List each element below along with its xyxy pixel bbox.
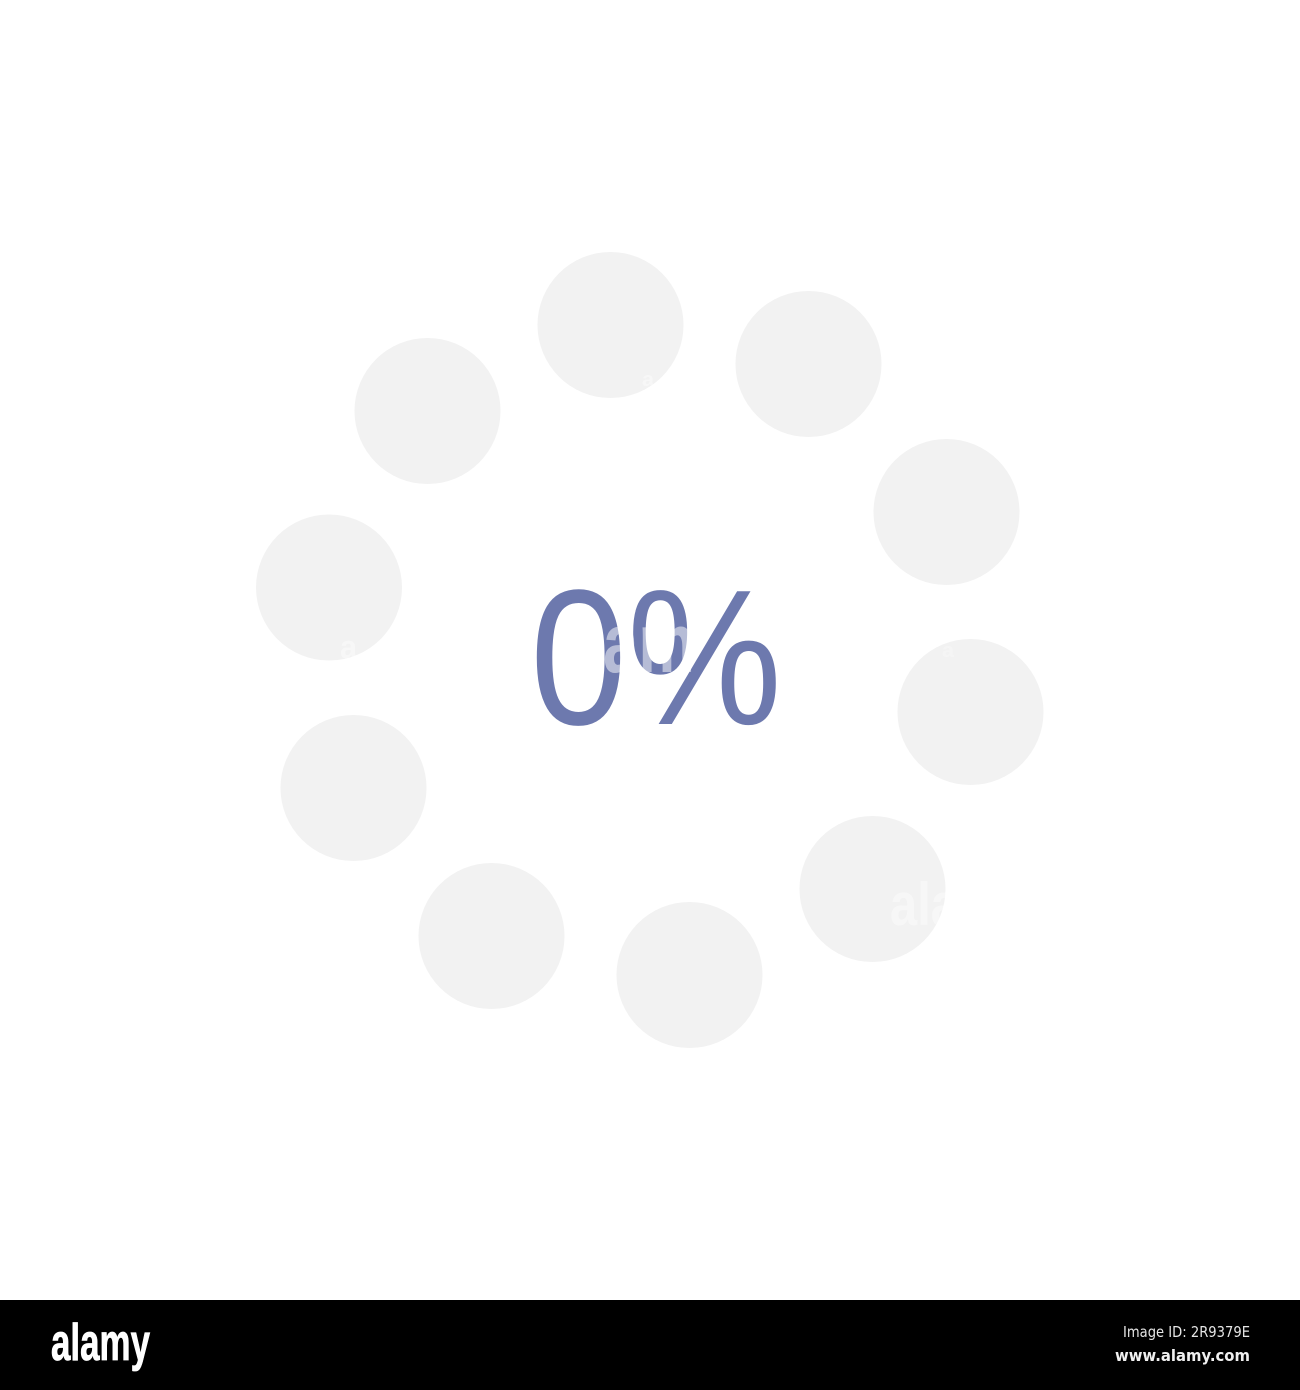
alamy logo: alamy [51,1314,150,1372]
faint stock watermark fragments: ala [890,871,959,938]
faint stock watermark fragments: am [603,596,695,690]
progress ring of ten dots [256,252,1044,1048]
faint stock watermark fragments: a [942,640,955,662]
percentage value: 0% [530,549,782,765]
faint stock watermark fragments [340,369,959,938]
watermark footer bar [0,1300,1300,1390]
faint stock watermark fragments: a [642,369,655,391]
faint stock watermark fragments: a [340,629,357,665]
image id: Image ID: 2R9379E [1123,1323,1250,1341]
website address: www.alamy.com [1115,1346,1250,1365]
